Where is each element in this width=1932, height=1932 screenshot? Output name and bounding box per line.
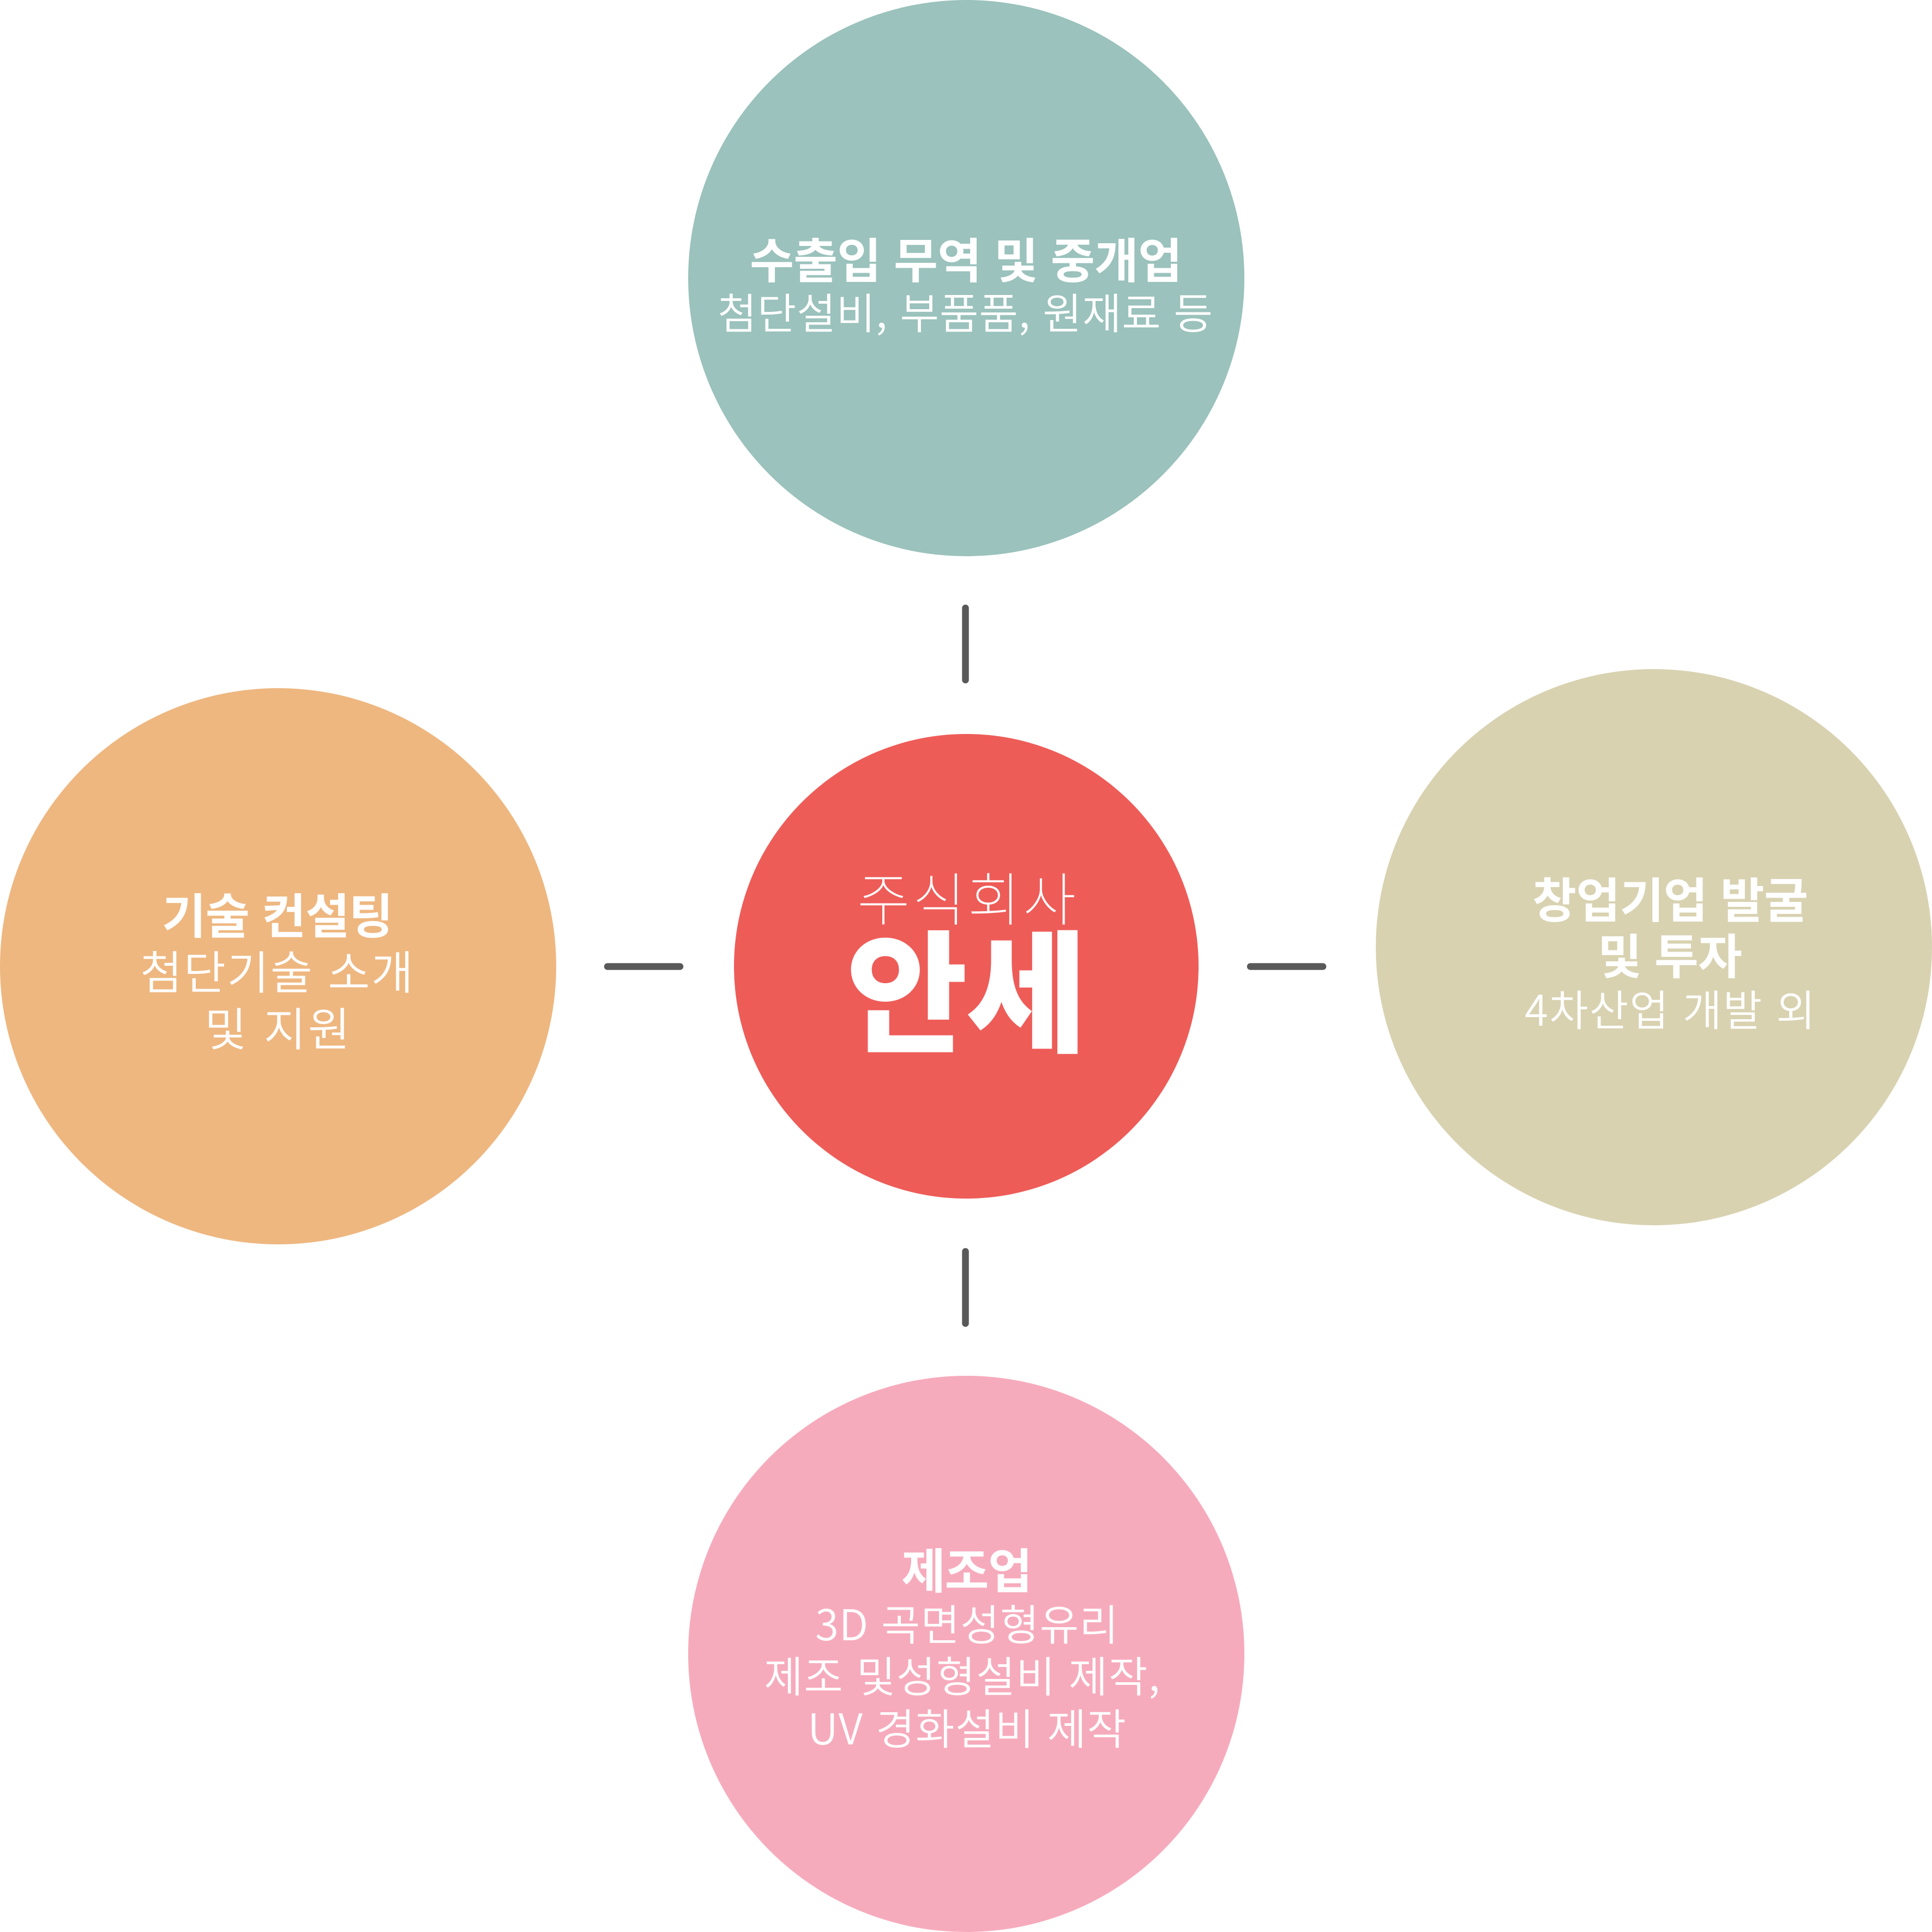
text: consulting details line 1: 첨단기술 소개 — [140, 937, 413, 1003]
connector: right — [1250, 963, 1323, 970]
connector: top — [962, 608, 969, 680]
connector: bottom — [962, 1251, 969, 1323]
text: manufacturing line 2: 제조 및성형설비 제작, — [764, 1644, 1160, 1705]
text: company type: 주식회사 — [857, 854, 1076, 937]
panel: top circle, import/export trade — [688, 0, 1244, 556]
heading: consulting: 기술 컨설팅 — [162, 878, 393, 948]
panel: bottom circle, manufacturing — [688, 1376, 1244, 1932]
heading: trade: 수출입 무역 및 중개업 — [750, 223, 1182, 292]
text: consulting details line 2: 및 지원 — [204, 994, 350, 1060]
heading: startups line 1: 창업기업 발굴 — [1532, 863, 1808, 932]
heading: startups line 2: 및 투자 — [1598, 919, 1742, 988]
text: manufacturing line 1: 3D 곡면성형유리 — [815, 1592, 1118, 1653]
text: trade details: 첨단설비, 부품품, 원재료 등 — [718, 280, 1213, 341]
panel: center circle, company name — [734, 734, 1199, 1199]
panel: left circle, technical consulting — [0, 688, 556, 1244]
panel: right circle, startups — [1376, 669, 1932, 1225]
heading: company name: 안세 — [846, 888, 1087, 1080]
text: startups details: 4차산업 개발 외 — [1525, 977, 1815, 1038]
connector: left — [607, 963, 680, 970]
text: manufacturing line 3: UV 경화설비 제작 — [808, 1696, 1126, 1757]
heading: manufacturing: 제조업 — [901, 1533, 1032, 1603]
